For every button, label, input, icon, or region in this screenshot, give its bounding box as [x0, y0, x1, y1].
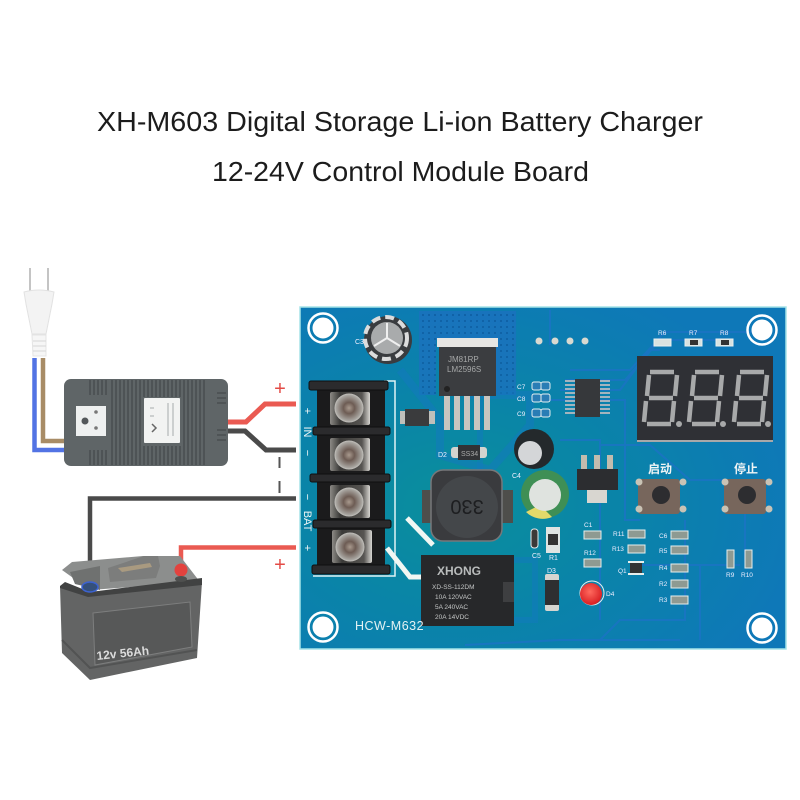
display [637, 356, 773, 442]
capacitors C7 C8 C9: C8 [517, 396, 526, 403]
terminal labels: − [301, 494, 313, 500]
title: XH-M603 Digital Storage Li-ion Battery Charger [97, 106, 703, 137]
LED D4: D4 [606, 591, 615, 598]
relay: XD-SS-112DM [432, 584, 475, 591]
terminal labels: − [301, 450, 313, 456]
resistors R6 R7 R8 [654, 330, 733, 346]
capacitor C3 [355, 316, 412, 364]
inductor 330: 330 [450, 495, 484, 517]
resistor and capacitor cluster: R11 [613, 531, 625, 538]
small passives C5 R1 D3: D3 [547, 568, 556, 575]
relay: 10A 120VAC [435, 594, 472, 601]
regulator LM2596S [437, 338, 498, 430]
icon: power adapter [64, 379, 228, 466]
icon: car battery: 12v 56Ah [96, 644, 150, 663]
header pin holes [536, 338, 588, 344]
resistor and capacitor cluster: R4 [659, 565, 668, 572]
start button [636, 461, 686, 514]
terminal labels: IN [301, 426, 313, 438]
resistors R6 R7 R8: R7 [689, 330, 698, 337]
LED D4 [580, 581, 615, 605]
resistor and capacitor cluster: Q1 [618, 568, 627, 575]
silkscreen [313, 381, 395, 576]
title: 12-24V Control Module Board [212, 156, 589, 187]
terminal labels: + [301, 408, 313, 414]
capacitor black [514, 429, 554, 469]
relay: XHONG [437, 564, 481, 578]
stop button: 停止 [734, 461, 758, 476]
adapter output cables to IN terminals [228, 404, 296, 450]
polarity marks [274, 378, 286, 576]
terminal labels: BAT [301, 511, 313, 532]
board name: HCW-M632 [355, 619, 424, 633]
inductor 330 [422, 470, 513, 541]
relay: 20A 14VDC [435, 614, 469, 621]
relay: 5A 240VAC [435, 604, 468, 611]
mains cables [34, 358, 66, 450]
resistor and capacitor cluster: R10 [741, 572, 753, 579]
terminal labels [301, 408, 313, 551]
relay [421, 555, 514, 626]
IC chip [565, 379, 610, 417]
capacitor green [512, 470, 569, 519]
mounting holes [308, 314, 776, 642]
polarity marks: + [274, 554, 286, 576]
icon: mains plug [24, 268, 54, 356]
copper traces [465, 310, 770, 645]
capacitors C7 C8 C9: C7 [517, 384, 526, 391]
terminal block [309, 381, 391, 574]
battery cables to BAT terminals [90, 498, 296, 585]
resistor and capacitor cluster: R12 [584, 550, 596, 557]
diode D2 SS34: SS34 [461, 451, 478, 458]
resistor and capacitor cluster: C6 [659, 533, 668, 540]
polarity marks: + [274, 378, 286, 400]
start button: 启动 [648, 461, 672, 476]
icon: car battery [60, 556, 202, 680]
resistor and capacitor cluster: R13 [612, 546, 624, 553]
small passives C5 R1 D3: C5 [532, 553, 541, 560]
capacitors C7 C8 C9: C9 [517, 411, 526, 418]
resistor and capacitor cluster: C1 [584, 522, 593, 529]
resistor and capacitor cluster: R3 [659, 597, 668, 604]
resistor and capacitor cluster: R5 [659, 548, 668, 555]
voltage regulator SOT-223 [577, 455, 618, 503]
resistors R6 R7 R8: R8 [720, 330, 729, 337]
resistor and capacitor cluster: R9 [726, 572, 735, 579]
resistors R6 R7 R8: R6 [658, 330, 667, 337]
regulator LM2596S: LM2596S [447, 365, 481, 374]
capacitor green: C4 [512, 473, 521, 480]
regulator LM2596S: JM81RP [448, 355, 479, 364]
resistor and capacitor cluster [584, 522, 753, 604]
diode D2 SS34: D2 [438, 452, 447, 459]
terminal labels: + [301, 545, 313, 551]
title [97, 106, 703, 187]
capacitor C3: C3 [355, 339, 364, 346]
small passives C5 R1 D3: R1 [549, 555, 558, 562]
diode D2 SS34 [438, 445, 487, 460]
resistor and capacitor cluster: R2 [659, 581, 668, 588]
small passives C5 R1 D3 [531, 527, 560, 611]
stop button [722, 461, 772, 514]
diode D1 [400, 409, 435, 426]
panel: circuit board [300, 307, 786, 649]
capacitors C7 C8 C9 [517, 382, 550, 418]
